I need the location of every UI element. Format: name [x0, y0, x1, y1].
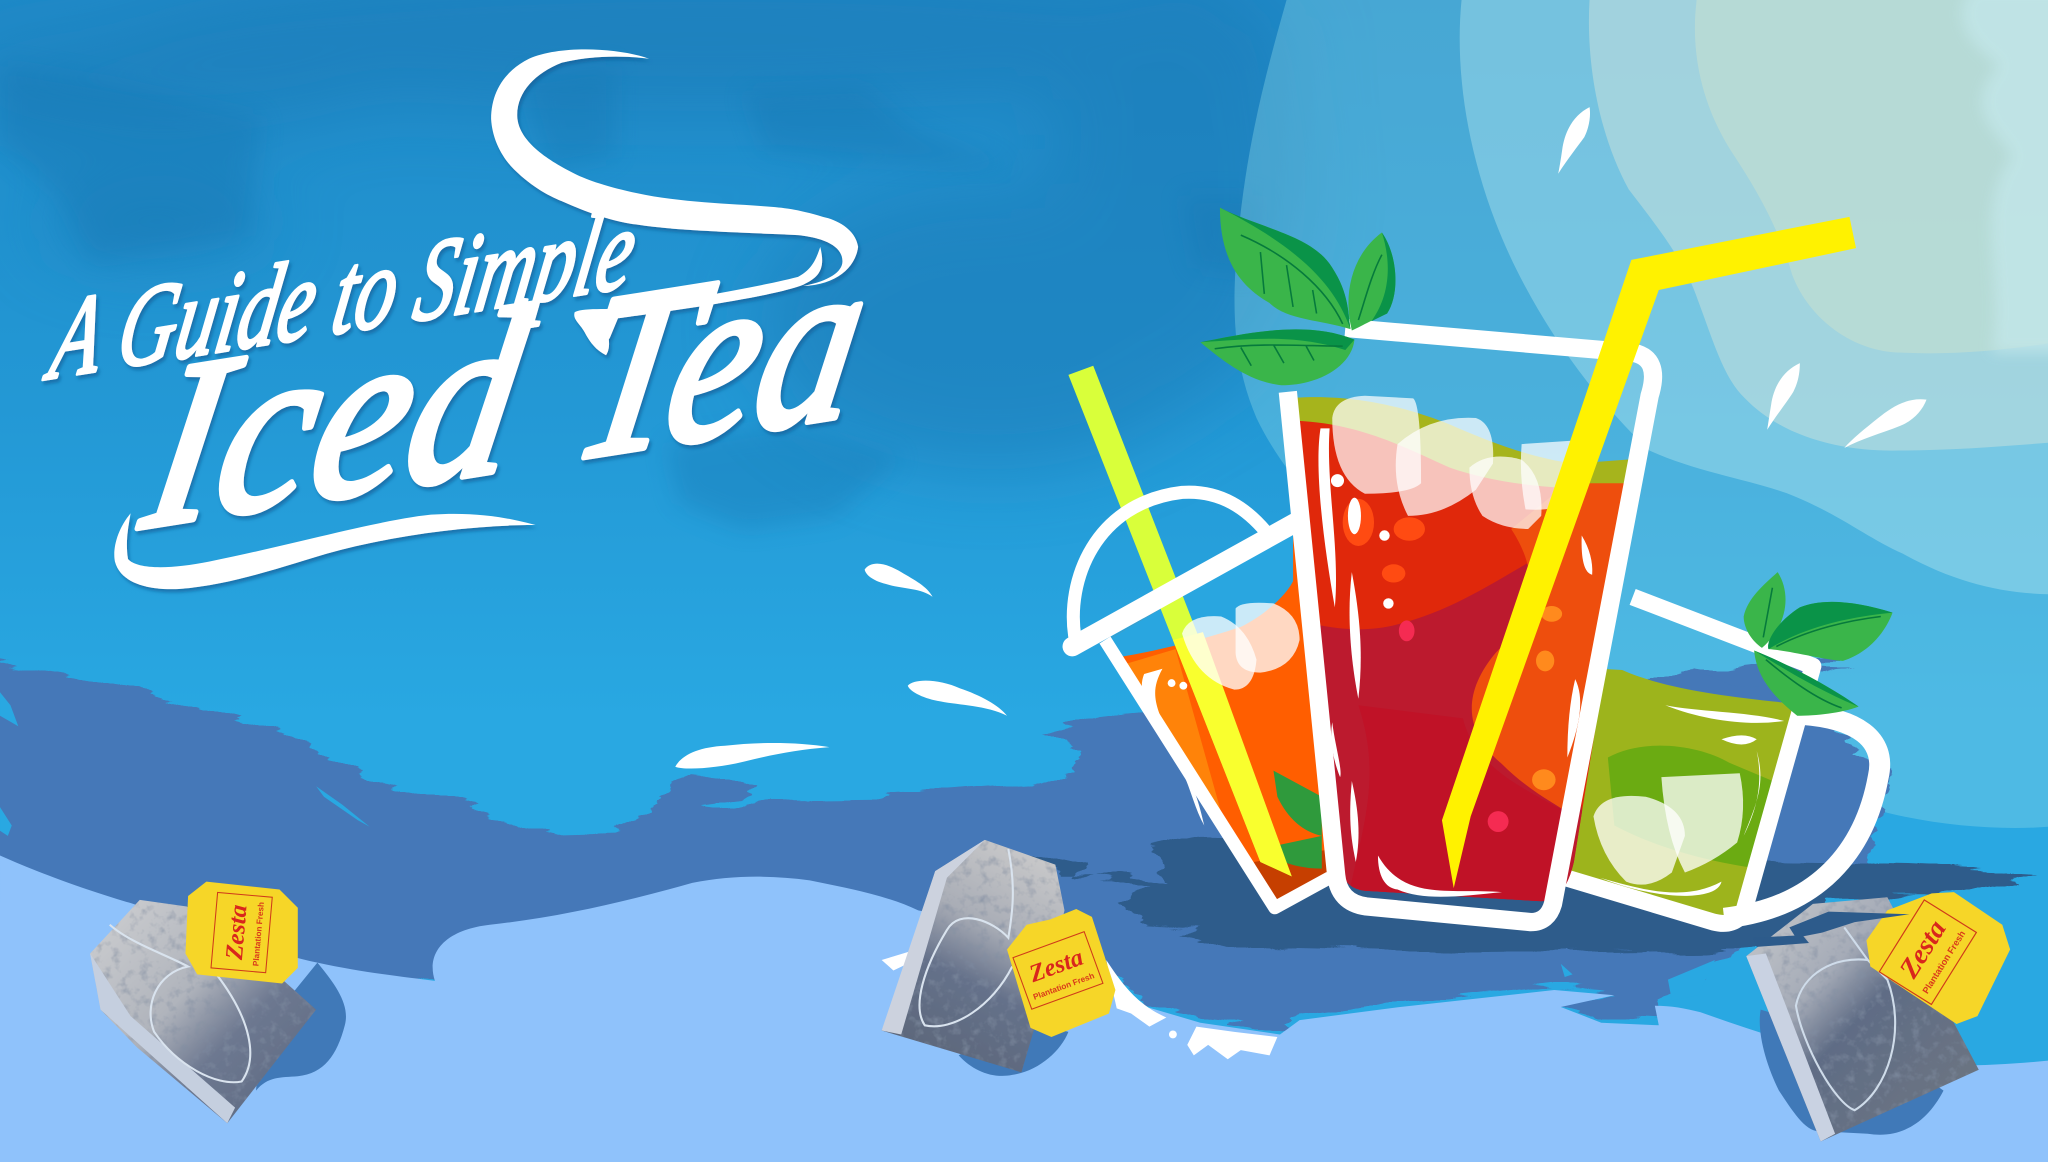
bag tag: Zesta	[1025, 944, 1087, 988]
T crossbar swash	[574, 247, 822, 355]
bag tag: Plantation Fresh	[1921, 929, 1967, 995]
cup dome lid	[1073, 492, 1267, 637]
tea bag: right	[1746, 892, 2010, 1142]
main title: Tea: Tea	[558, 203, 886, 512]
bright streaks in band	[0, 692, 1715, 1000]
mug ice cubes	[1593, 773, 1743, 885]
deep crimson base	[1351, 714, 1546, 902]
bag tag	[185, 882, 298, 984]
white highlights	[1318, 428, 1631, 897]
lower swash	[114, 513, 536, 589]
bag tag	[1866, 892, 2010, 1024]
brush band: mid blue	[0, 653, 1890, 1031]
mug liquid	[1572, 669, 1792, 915]
bag body	[90, 900, 316, 1123]
takeaway cup drink	[1068, 366, 1345, 927]
crimson lower layer	[1320, 564, 1582, 902]
tall glass drink	[1200, 208, 1856, 940]
mug highlights	[1600, 705, 1784, 896]
bag string	[110, 925, 250, 1082]
bubbles	[1343, 499, 1425, 583]
olive surface	[1298, 397, 1628, 488]
bag string	[1796, 927, 1895, 1110]
mug drink	[1535, 597, 1880, 927]
bag body	[882, 840, 1064, 1072]
yellow straw	[1442, 217, 1856, 888]
tea bag: centre	[882, 840, 1115, 1072]
main title: Iced: Iced	[128, 257, 544, 580]
subtitle: A Guide to Simple	[38, 184, 646, 406]
bag body	[1746, 897, 1979, 1142]
tea bag shadows	[256, 963, 1944, 1135]
orange side layer	[1472, 483, 1624, 808]
background: layered pale wave shapes	[1234, 0, 2048, 828]
mug handle	[1724, 714, 1880, 918]
bag string	[920, 849, 1013, 1026]
bag tag: Plantation Fresh	[251, 902, 266, 967]
cup green straw	[1068, 366, 1292, 876]
cup liquid	[1111, 536, 1327, 899]
glass liquid layers	[1298, 397, 1628, 902]
splash drops	[675, 107, 1927, 769]
mint leaves: mug	[1744, 572, 1893, 716]
glass outline	[1288, 328, 1653, 922]
white brush flecks near centre	[882, 951, 1277, 1059]
red upper layer	[1300, 421, 1596, 902]
bag tag: Zesta	[1893, 915, 1953, 984]
top steam swash	[491, 49, 858, 286]
cup wall outline	[1105, 640, 1330, 908]
bag tag: Plantation Fresh	[1032, 971, 1096, 1002]
submerged leaf	[1274, 770, 1322, 869]
tea bag: left	[90, 882, 316, 1123]
cup bubbles	[1142, 669, 1251, 878]
glass ice cubes	[1332, 396, 1586, 529]
cup lid rim	[1072, 522, 1296, 647]
pale blue foreground wave	[0, 856, 2048, 1162]
bag tag	[1007, 909, 1115, 1037]
mug outline	[1557, 597, 1813, 923]
bag tag: Zesta	[221, 904, 253, 962]
title: A Guide to Simple Iced Tea	[38, 49, 886, 589]
brush band: dark navy shadow	[1031, 836, 2039, 953]
cup ice cubes	[1182, 603, 1300, 690]
mint leaves: glass	[1200, 208, 1395, 385]
